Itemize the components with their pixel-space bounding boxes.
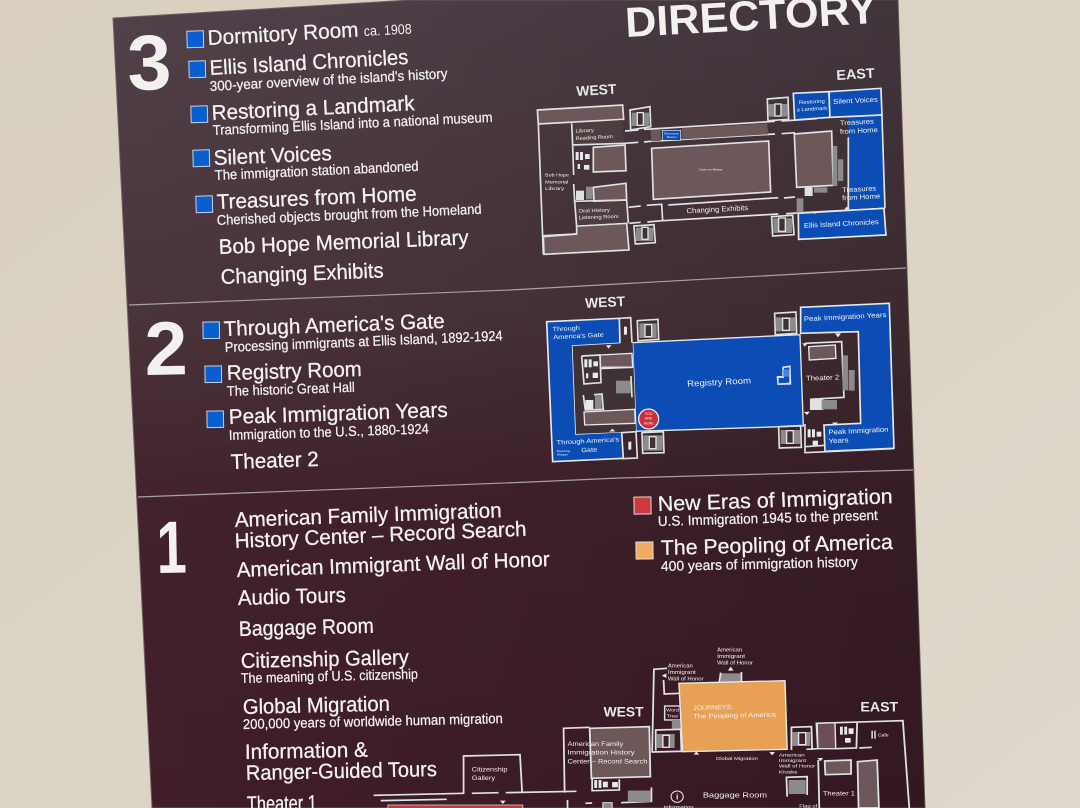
item: Treasures from Home bbox=[216, 183, 482, 228]
labels level 1 bbox=[472, 648, 898, 808]
stair cores level 3 bbox=[630, 97, 843, 244]
item: Registry Room: The historic Great Hall bbox=[227, 379, 355, 399]
item: The Peopling of America: The Peopling of America bbox=[661, 531, 893, 560]
item: Information and Ranger-Guided Tours: Information & bbox=[245, 739, 368, 764]
item: Dormitory Room: Dormitory Room bbox=[207, 19, 359, 50]
labels level 2: Hearing bbox=[557, 449, 571, 453]
labels level 1: Gallery bbox=[472, 775, 496, 782]
labels level 2: America's Gate bbox=[553, 332, 605, 341]
floor map: level 1 bbox=[374, 648, 909, 808]
item: Changing Exhibits: Changing Exhibits bbox=[220, 259, 384, 289]
item: American Immigrant Wall of Honor: American Immigrant Wall of Honor bbox=[236, 548, 550, 582]
labels level 2: Years bbox=[828, 437, 849, 445]
labels level 3: Listening Room bbox=[579, 214, 619, 221]
item: Global Migration bbox=[243, 693, 503, 732]
labels level 3: Bob Hope bbox=[545, 173, 569, 179]
item: Peak Immigration Years: Immigration to the U.S., 1880-1924 bbox=[229, 420, 429, 443]
labels level 3: Dormitory bbox=[664, 131, 679, 135]
item: Baggage Room: Baggage Room bbox=[239, 615, 374, 641]
item: Peak Immigration Years: Peak Immigration Years bbox=[228, 399, 448, 429]
item: Information and Ranger-Guided Tours: Ranger-Guided Tours bbox=[246, 758, 437, 785]
item: Through America's Gate: Through America's Gate bbox=[223, 310, 445, 341]
item: Silent Voices: The immigration station abandoned bbox=[214, 158, 419, 183]
rooms and walls level 3 bbox=[537, 105, 883, 254]
labels level 2: Peak Immigration Years bbox=[804, 312, 887, 323]
labels level 1: Wall of Honor bbox=[717, 661, 753, 667]
walls and rooms level 1 bbox=[374, 668, 909, 808]
item: Bob Hope Memorial Library: Bob Hope Memorial Library bbox=[218, 226, 469, 259]
item: Registry Room: Registry Room bbox=[226, 358, 362, 385]
panel: floor 3 listing bbox=[126, 18, 493, 289]
item: Restoring a Landmark: Transforming Ellis Island into a national museum bbox=[212, 109, 493, 138]
labels level 3: Silent Voices bbox=[833, 97, 879, 106]
labels level 1: Immigrant bbox=[779, 758, 807, 764]
labels level 1: Word bbox=[666, 708, 679, 714]
item: Audio Tours: Audio Tours bbox=[237, 584, 346, 610]
item: The Peopling of America: 400 years of immigration history bbox=[661, 554, 858, 574]
panel: floor 2 listing bbox=[144, 306, 503, 474]
labels level 1: American bbox=[717, 648, 742, 654]
labels level 3 bbox=[545, 65, 880, 230]
labels level 2: Through America's bbox=[556, 436, 619, 447]
labels level 1: Immigrant bbox=[668, 670, 696, 676]
item: Global Migration: Global Migration bbox=[243, 693, 390, 719]
labels level 2: Theater 2 bbox=[806, 374, 839, 383]
floor number 1: 1 bbox=[156, 505, 187, 589]
item: Silent Voices bbox=[213, 142, 419, 183]
labels level 1: American bbox=[668, 664, 693, 670]
labels level 2: Peak Immigration bbox=[828, 427, 889, 437]
labels level 1: American Family bbox=[567, 741, 624, 748]
labels level 1: i bbox=[676, 792, 679, 801]
item: Ellis Island Chronicles: Ellis Island Chronicles bbox=[209, 46, 409, 80]
labels level 3: a Landmark bbox=[796, 106, 828, 113]
rooms and walls level 2 bbox=[573, 318, 893, 459]
labels level 3: WEST bbox=[576, 81, 617, 99]
item: Treasures from Home: Treasures from Home bbox=[216, 183, 417, 214]
labels level 3: EAST bbox=[836, 65, 876, 83]
item: Ellis Island Chronicles bbox=[209, 46, 448, 94]
labels level 1: EAST bbox=[860, 700, 898, 715]
labels level 1: Immigration History bbox=[567, 750, 636, 757]
labels level 3: from Home bbox=[840, 127, 878, 136]
icon: you are here: HERE bbox=[644, 421, 654, 425]
labels level 3: Ellis Island Chronicles bbox=[804, 219, 880, 230]
labels level 3: Library bbox=[575, 128, 595, 135]
item: Ellis Island Chronicles: 300-year overview of the island's history bbox=[209, 65, 448, 94]
labels level 1: Immigrant bbox=[717, 654, 746, 660]
labels level 1: Global Migration bbox=[716, 756, 758, 762]
labels level 3: Reading Room bbox=[575, 134, 613, 142]
labels level 1: Kiosks bbox=[779, 769, 798, 775]
marker: blue squares bbox=[203, 322, 224, 428]
item: Global Migration: 200,000 years of worldwide human migration bbox=[243, 710, 503, 732]
item: Restoring a Landmark: Restoring a Landmark bbox=[211, 92, 415, 125]
icon: you are here: YOU bbox=[645, 412, 653, 416]
labels level 3: Open to Below bbox=[699, 168, 723, 172]
marker: blue squares bbox=[187, 31, 213, 213]
icon: you are here bbox=[639, 409, 659, 429]
labels level 2 bbox=[552, 293, 889, 457]
orange exhibit: Journeys: JOURNEYS: bbox=[693, 704, 733, 712]
item: Theater 2: Theater 2 bbox=[230, 448, 319, 474]
labels level 2: Through bbox=[552, 325, 581, 333]
labels level 3: Changing Exhibits bbox=[686, 203, 749, 215]
labels level 3: Library bbox=[545, 186, 565, 192]
item: Citizenship Gallery: The meaning of U.S. citizenship bbox=[241, 666, 418, 686]
labels level 3: from Home bbox=[842, 193, 880, 202]
item: Silent Voices: Silent Voices bbox=[213, 142, 332, 170]
labels level 2: Slipper bbox=[557, 453, 568, 457]
item: Restoring a Landmark bbox=[211, 92, 493, 138]
item: Through America's Gate: Processing immigrants at Ellis Island, 1892-1924 bbox=[224, 327, 503, 355]
labels level 1: Wall of Honor bbox=[779, 764, 816, 770]
labels level 3: Restoring bbox=[799, 99, 825, 106]
item: Treasures from Home: Cherished objects brought from the Homeland bbox=[216, 201, 482, 228]
stair cores level 2 bbox=[637, 312, 801, 453]
icon: stairs in registry room bbox=[777, 365, 791, 385]
labels level 3: Treasures bbox=[840, 119, 875, 127]
item: Peak Immigration Years bbox=[228, 399, 448, 443]
labels level 2: Gate bbox=[581, 446, 598, 454]
floor number 2: 2 bbox=[144, 306, 188, 392]
floor map: level 3 bbox=[537, 65, 886, 254]
item: Information and Ranger-Guided Tours bbox=[245, 739, 437, 785]
item: The Peopling of America bbox=[636, 531, 893, 574]
labels level 1: Tree bbox=[667, 713, 679, 719]
floor number 3: 3 bbox=[126, 18, 172, 107]
orange exhibit: Journeys bbox=[679, 681, 787, 752]
labels level 1: Cafe bbox=[878, 732, 889, 738]
labels level 3: Room bbox=[667, 135, 677, 139]
orange exhibit: Journeys: The Peopling of America bbox=[693, 712, 777, 721]
directory board bbox=[113, 0, 925, 808]
blue exhibit rooms level 2 bbox=[547, 303, 894, 462]
icon: restrooms level 3 bbox=[576, 152, 849, 214]
item: Through America's Gate bbox=[223, 310, 503, 355]
labels level 1: Center – Record Search bbox=[567, 758, 648, 765]
labels level 3: Oral History bbox=[579, 208, 611, 215]
labels level 3: Memorial bbox=[545, 179, 568, 185]
item: American Family Immigration History Center bbox=[234, 499, 527, 553]
icon: restrooms level 2 bbox=[584, 327, 841, 450]
labels level 1: Citizenship bbox=[472, 766, 508, 773]
panel: floor 1 listing bbox=[156, 485, 893, 808]
labels level 1: Theater 1 bbox=[823, 791, 855, 798]
labels level 1: WEST bbox=[604, 705, 644, 721]
labels level 1: Wall of Honor bbox=[668, 677, 704, 683]
labels level 2: WEST bbox=[585, 293, 626, 311]
item: Citizenship Gallery: Citizenship Gallery bbox=[241, 646, 410, 673]
icon: restrooms and arrows level 1 bbox=[500, 667, 876, 804]
item: New Eras of Immigration bbox=[634, 485, 893, 529]
item: Registry Room bbox=[226, 358, 362, 399]
item: New Eras of Immigration: U.S. Immigration 1945 to the present bbox=[658, 507, 878, 529]
item: Dormitory Room: ca. 1908 bbox=[363, 20, 412, 39]
item: American Family Immigration History Center: History Center – Record Search bbox=[234, 518, 527, 553]
labels level 3: Treasures bbox=[842, 186, 877, 194]
labels level 1: Baggage Room bbox=[703, 791, 768, 799]
labels level 2: Registry Room bbox=[687, 375, 751, 389]
item: Citizenship Gallery bbox=[241, 646, 418, 686]
blue exhibit rooms level 3 bbox=[662, 88, 886, 239]
floor map: level 2 bbox=[547, 293, 894, 462]
item: New Eras of Immigration: New Eras of Immigration bbox=[657, 485, 893, 516]
icon: you are here: ARE bbox=[645, 417, 653, 421]
labels level 1: American bbox=[779, 753, 805, 759]
item: American Family Immigration History Center: American Family Immigration bbox=[234, 499, 502, 532]
